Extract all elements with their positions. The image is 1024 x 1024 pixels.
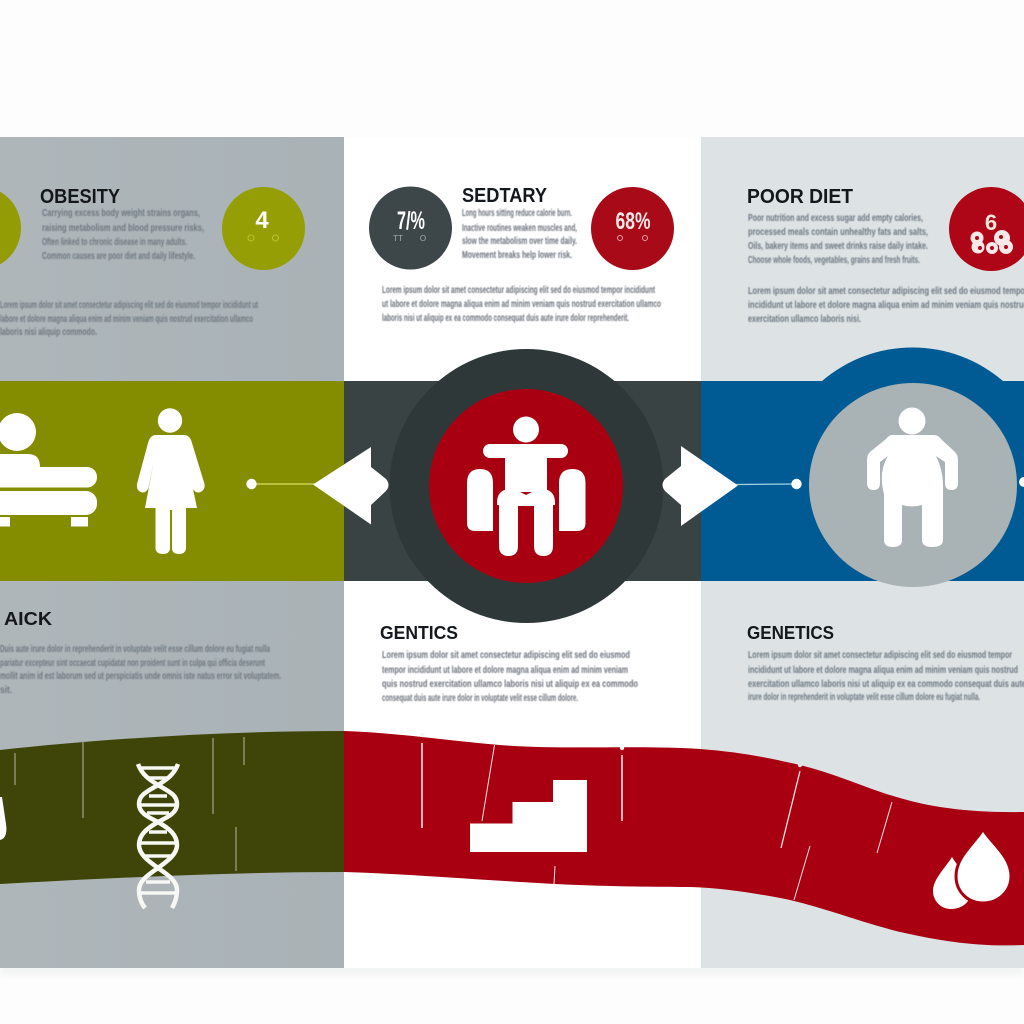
text block: aick: Duis aute irure dolor in reprehenderit in voluptate velit esse cillum dolore eu fugiat nulla (0, 644, 270, 655)
stat circle: 7%: TT (393, 234, 403, 243)
heading: poor diet: POOR DIET (747, 186, 853, 208)
band: olive (0, 381, 344, 581)
panel: poor diet (701, 137, 1024, 968)
text block: sedentary summary: slow the metabolism over time daily. (462, 236, 577, 247)
band: blue (701, 348, 1024, 581)
icon: stairs (470, 780, 587, 852)
stat circle: 68% (591, 187, 674, 270)
partial olive circle (0, 186, 21, 270)
icon: person lying on bed (0, 413, 97, 526)
text block: genetics (748, 650, 1024, 703)
stat circle: 6 with food icons: 6 (985, 210, 997, 235)
text block: obesity details (0, 300, 258, 338)
arrow: left (246, 447, 388, 524)
heading: sedentary: SEDTARY (462, 185, 548, 207)
stat circle: 7% (369, 186, 452, 270)
text block: obesity summary: Common causes are poor diet and daily lifestyle. (42, 251, 195, 262)
heading: aick: AICK (4, 609, 52, 629)
stat circle: 4: 4 (255, 207, 269, 234)
text block: gentics: consequat duis aute irure dolor in voluptate velit esse cillum dolore. (382, 693, 578, 704)
text block: obesity summary (42, 208, 204, 262)
stat circle: 7%: 7/% (397, 207, 425, 235)
text block: sedentary details: laboris nisi ut aliquip ex ea commodo consequat duis aute irure dolor reprehenderit. (382, 313, 629, 324)
text block: poor diet summary: Poor nutrition and excess sugar add empty calories, (748, 213, 923, 224)
text block: obesity details: labore et dolore magna aliqua enim ad minim veniam quis nostrud exercitation ullamco (0, 314, 253, 325)
icon: woman (137, 408, 205, 554)
panel: sedentary (344, 137, 701, 968)
circle: grey figure badge (809, 383, 1017, 587)
ribbon: red (344, 731, 1024, 945)
text block: poor diet details (748, 286, 1024, 325)
pin lines (15, 737, 244, 871)
text block: sedentary summary: Long hours sitting reduce calorie burn. (462, 208, 572, 219)
dot: right edge connector (1019, 477, 1024, 487)
text block: obesity summary: Often linked to chronic disease in many adults. (42, 237, 187, 248)
icon: seated person (467, 416, 586, 556)
band: dark centre (344, 381, 701, 581)
text block: gentics: quis nostrud exercitation ullamco laboris nisi ut aliquip ex ea commodo (382, 679, 638, 690)
icon: drops (933, 829, 1011, 909)
icon: dna helix (138, 764, 178, 908)
text block: poor diet details: exercitation ullamco laboris nisi. (748, 314, 861, 325)
text block: gentics (382, 650, 638, 704)
text block: aick (0, 644, 281, 696)
text block: poor diet summary: processed meals contain unhealthy fats and salts, (748, 227, 928, 238)
circle: central sedentary badge (390, 349, 664, 623)
text block: obesity details: laboris nisi aliquip commodo. (0, 327, 97, 338)
text block: poor diet summary: Choose whole foods, vegetables, grains and fresh fruits. (748, 255, 920, 266)
text block: sedentary details: ut labore et dolore magna aliqua enim ad minim veniam quis nostrud exercitation ullamco (382, 299, 661, 310)
text block: gentics: tempor incididunt ut labore et dolore magna aliqua enim ad minim veniam (382, 665, 628, 676)
text block: sedentary summary (462, 208, 577, 261)
text block: obesity details: Lorem ipsum dolor sit amet consectetur adipiscing elit sed do eiusmod tempor incididunt ut (0, 300, 258, 311)
panel: obesity (0, 137, 344, 968)
icon: pear (0, 797, 6, 840)
text block: obesity summary: Carrying excess body weight strains organs, (42, 208, 200, 219)
heading: gentics: GENTICS (380, 623, 458, 643)
pin lines (422, 743, 892, 900)
stat circle: 7%: O (420, 234, 426, 243)
stat circle: 4 (222, 187, 305, 270)
text block: aick: mollit anim id est laborum sed ut perspiciatis unde omnis iste natus error sit voluptatem. (0, 671, 281, 682)
text block: sedentary details (382, 285, 661, 324)
text block: obesity summary: raising metabolism and blood pressure risks, (42, 223, 204, 234)
text block: sedentary summary: Inactive routines weaken muscles and, (462, 223, 577, 234)
text block: poor diet summary (748, 213, 928, 266)
text block: gentics: Lorem ipsum dolor sit amet consectetur adipiscing elit sed do eiusmod (382, 650, 630, 661)
stat circle: 68%: 68% (616, 208, 650, 235)
icon: overweight person (867, 408, 958, 547)
text block: poor diet summary: Oils, bakery items and sweet drinks raise daily intake. (748, 241, 928, 252)
stat circle: 6 with food icons (949, 187, 1024, 271)
heading: genetics: GENETICS (747, 623, 834, 643)
ribbon: olive (0, 731, 344, 908)
arrow: right (662, 446, 802, 526)
heading: obesity: OBESITY (40, 186, 121, 208)
text block: sedentary details: Lorem ipsum dolor sit amet consectetur adipiscing elit sed do eiusmod tempor incididunt (382, 285, 655, 296)
soft shadow under panels (0, 966, 1024, 973)
text block: sedentary summary: Movement breaks help lower risk. (462, 250, 572, 261)
text block: aick: pariatur excepteur sint occaecat cupidatat non proident sunt in culpa qui officia deserunt (0, 658, 265, 669)
text block: aick: sit. (0, 685, 12, 696)
